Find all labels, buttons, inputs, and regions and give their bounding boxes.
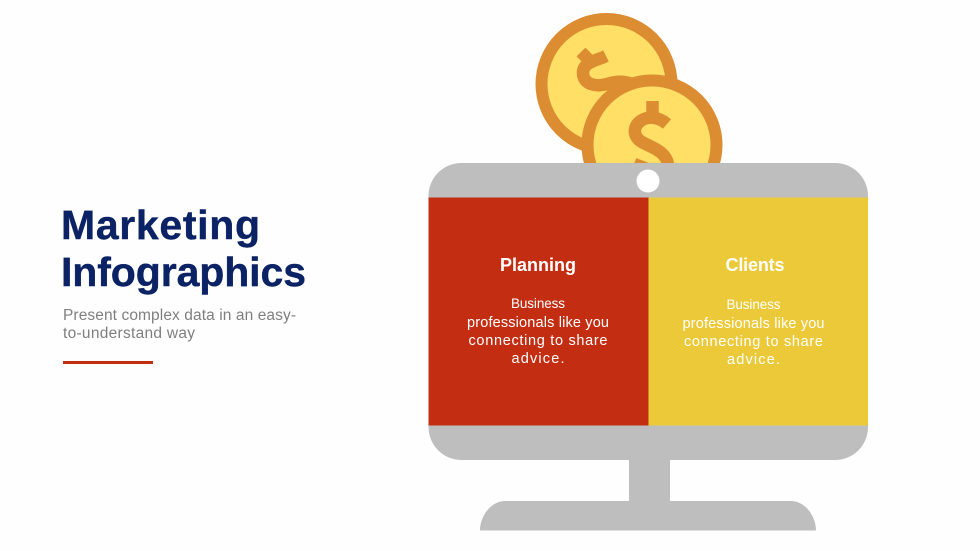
clients text: Business: [726, 297, 781, 312]
clients text: advice.: [727, 352, 780, 368]
red accent line: [63, 361, 153, 364]
panel: clients: [648, 198, 868, 426]
subtitle text: to-understand way: [63, 325, 195, 342]
title: [61, 202, 306, 295]
monitor body: [428, 163, 868, 460]
clients text: [682, 297, 824, 368]
title: Marketing: [61, 202, 260, 248]
planning text: [467, 296, 609, 367]
planning text: connecting to share: [468, 333, 608, 349]
planning text: advice.: [512, 351, 564, 367]
monitor: [428, 163, 868, 530]
panel: planning: [428, 198, 648, 426]
planning text: Business: [511, 296, 565, 311]
camera dot: [636, 170, 660, 192]
subtitle text: [63, 307, 296, 342]
icon: back coin: [542, 19, 672, 149]
planning text: professionals like you: [467, 315, 609, 331]
subtitle text: Present complex data in an easy-: [63, 307, 296, 324]
planning heading: Planning: [500, 255, 576, 275]
clients heading: Clients: [726, 255, 784, 275]
title: Infographics: [61, 249, 306, 295]
clients text: connecting to share: [684, 334, 823, 350]
clients text: professionals like you: [682, 316, 824, 332]
monitor stand: [480, 455, 816, 530]
icon: front coin: [588, 80, 716, 210]
